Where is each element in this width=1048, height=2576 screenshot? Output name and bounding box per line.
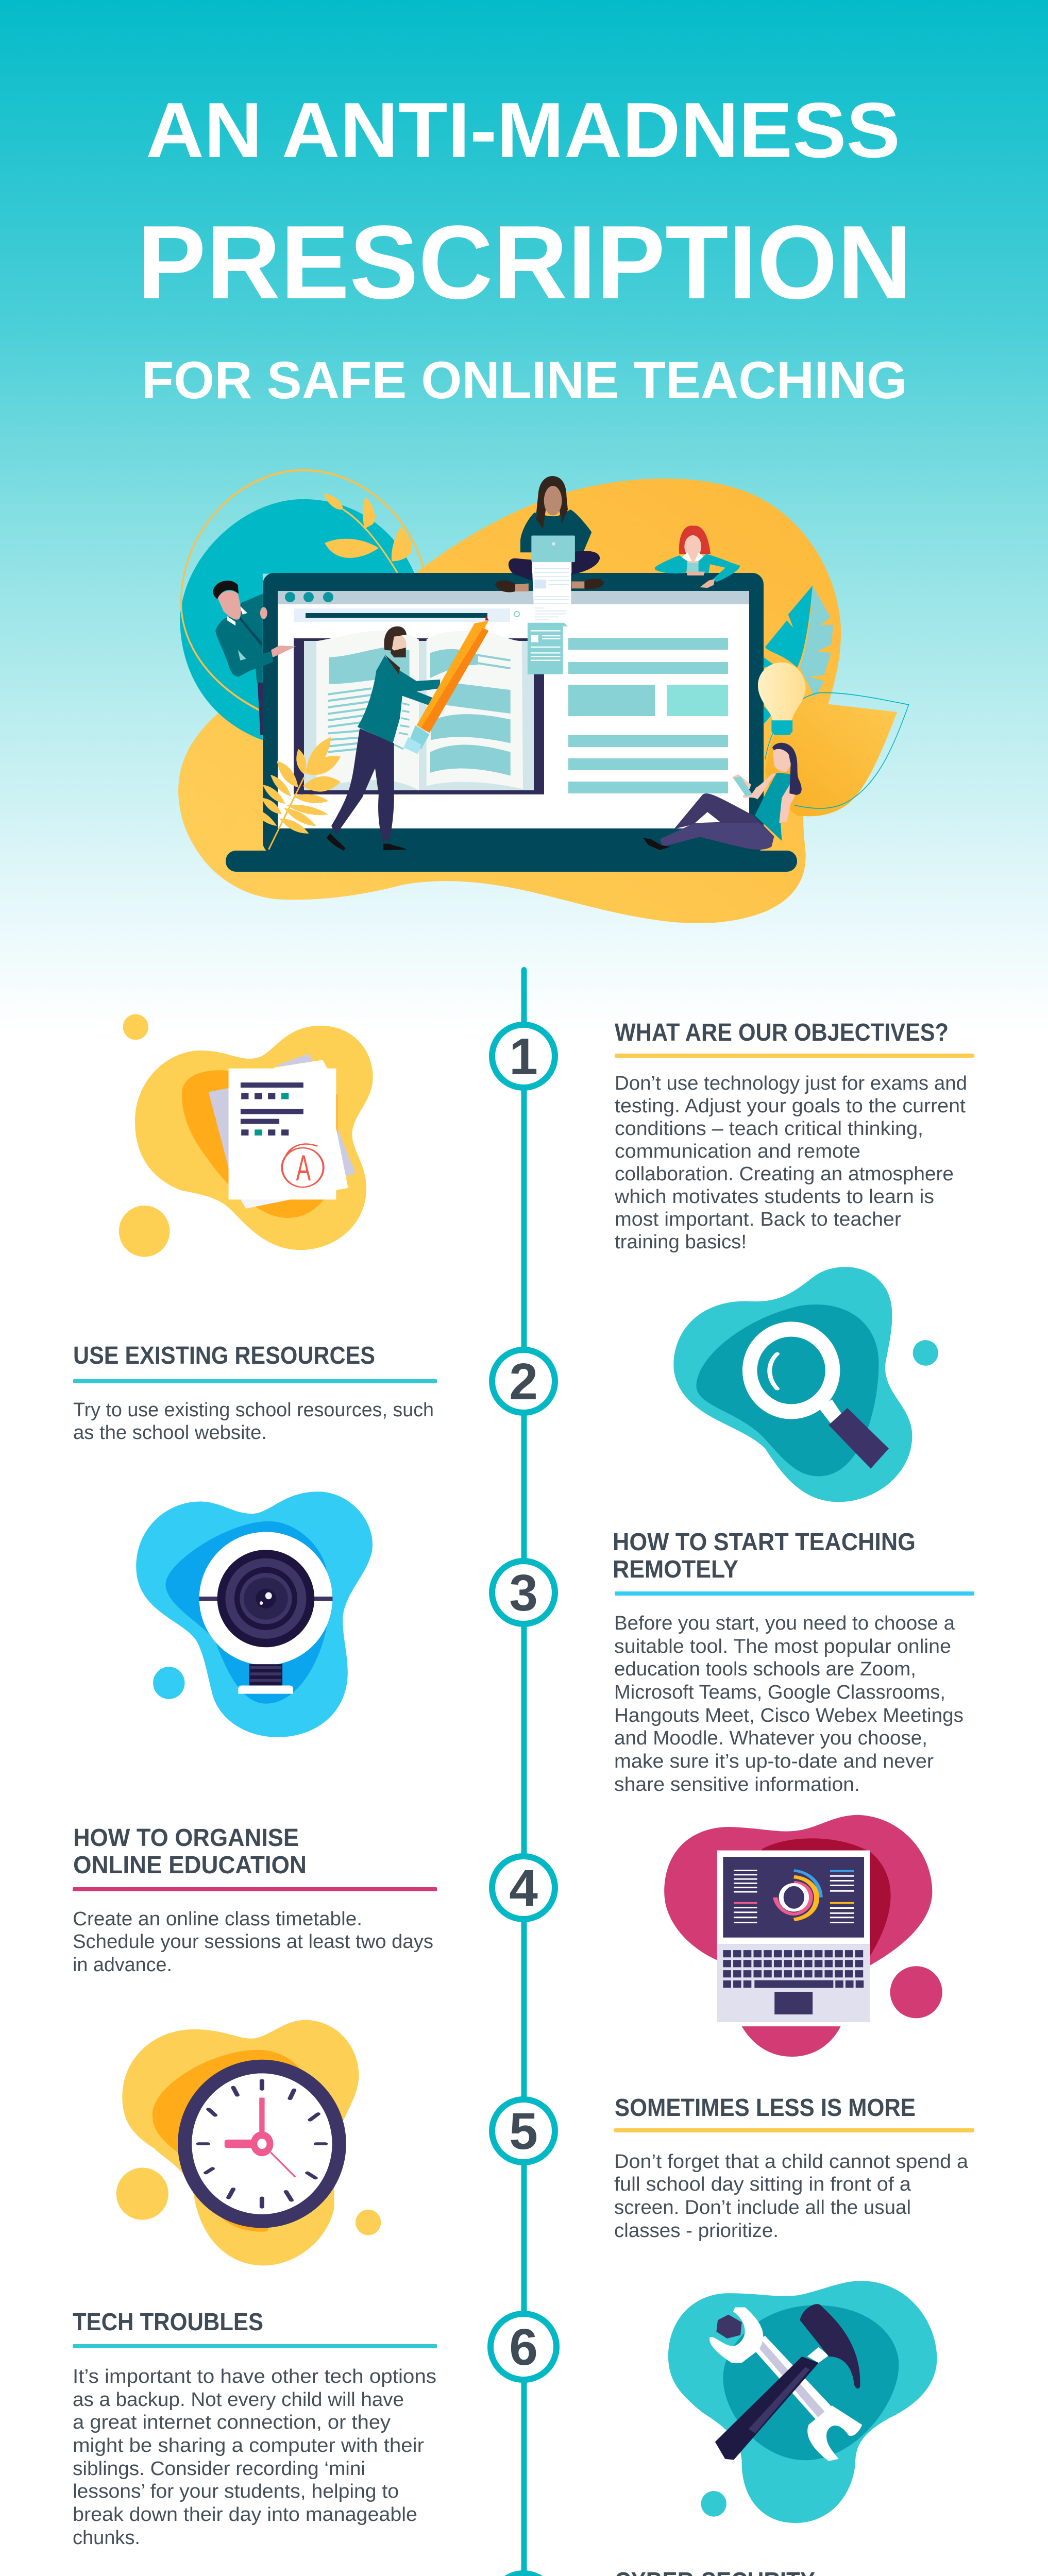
heading: SOMETIMES LESS IS MORE xyxy=(615,2094,916,2122)
icon: webcam xyxy=(136,1492,373,1737)
body text: in advance. xyxy=(73,1954,172,1976)
body text: Before you start, you need to choose a xyxy=(614,1613,955,1634)
body text xyxy=(73,2366,436,2549)
woman on top with laptop, red-haired woman, lightbulb, reading woman xyxy=(495,476,806,850)
section 1: what are our objectives xyxy=(614,1019,974,1253)
body text xyxy=(73,1399,434,1444)
open book and man with pencil xyxy=(316,616,523,851)
step 3 number: 3 xyxy=(509,1564,538,1622)
body text: break down their day into manageable xyxy=(73,2504,417,2526)
body text: collaboration. Creating an atmosphere xyxy=(615,1163,954,1185)
body text: education tools schools are Zoom, xyxy=(614,1658,916,1680)
section 2: use existing resources xyxy=(73,1342,437,1444)
teal background blob with ring and sprig xyxy=(180,470,425,740)
body text: siblings. Consider recording ‘mini xyxy=(73,2458,365,2480)
step 2 number xyxy=(492,1350,555,1413)
step 5 number: 5 xyxy=(509,2103,538,2160)
heading: WHAT ARE OUR OBJECTIVES? xyxy=(615,1019,949,1046)
body text: Don’t use technology just for exams and xyxy=(615,1073,967,1094)
underline xyxy=(73,1379,437,1383)
heading xyxy=(613,1529,916,1583)
body text: chunks. xyxy=(73,2527,140,2549)
step 5 number xyxy=(492,2099,555,2162)
heading xyxy=(73,1824,307,1879)
step 7 number xyxy=(492,2573,555,2576)
heading: USE EXISTING RESOURCES xyxy=(73,1342,375,1369)
body text: full school day sitting in front of a xyxy=(614,2174,911,2195)
body text: testing. Adjust your goals to the current xyxy=(615,1095,966,1117)
hero illustration: laptop with people xyxy=(178,470,909,923)
step 4 number: 4 xyxy=(509,1859,538,1917)
icon: laptop xyxy=(664,1815,942,2057)
title line 3: FOR SAFE ONLINE TEACHING xyxy=(142,351,907,410)
underline xyxy=(615,1054,974,1058)
body text xyxy=(614,1073,967,1253)
body text: and Moodle. Whatever you choose, xyxy=(614,1727,927,1749)
body text: screen. Don’t include all the usual xyxy=(614,2197,911,2218)
step 1 number xyxy=(492,1025,555,1088)
icon: magnifying glass xyxy=(673,1267,938,1502)
body text: training basics! xyxy=(615,1231,747,1253)
title xyxy=(137,87,912,410)
body text: most important. Back to teacher xyxy=(615,1209,901,1230)
body text: Hangouts Meet, Cisco Webex Meetings xyxy=(614,1705,964,1726)
step 3 number xyxy=(492,1561,555,1624)
section 4: how to organise online education xyxy=(73,1824,437,1976)
body text: make sure it’s up-to-date and never xyxy=(614,1751,934,1772)
body text: conditions – teach critical thinking, xyxy=(615,1118,923,1140)
body text: a great internet connection, or they xyxy=(73,2412,391,2433)
underline xyxy=(615,1591,974,1596)
step 2 number: 2 xyxy=(509,1353,538,1411)
plant in the foreground xyxy=(249,732,343,850)
body text xyxy=(614,2151,969,2242)
underline xyxy=(73,2344,437,2348)
heading: HOW TO START TEACHING xyxy=(613,1529,916,1556)
timeline line xyxy=(521,967,527,2576)
section 6: tech troubles xyxy=(73,2309,437,2549)
body text: Try to use existing school resources, such xyxy=(73,1399,434,1421)
body text: share sensitive information. xyxy=(614,1774,860,1795)
section 3: how to start teaching remotely xyxy=(613,1529,974,1795)
body text: Create an online class timetable. xyxy=(73,1908,362,1930)
title line 2: PRESCRIPTION xyxy=(137,204,912,321)
body text: Microsoft Teams, Google Classrooms, xyxy=(614,1682,945,1703)
icon: clock xyxy=(116,2020,381,2265)
body text: It’s important to have other tech options xyxy=(73,2366,436,2387)
man peeking from behind laptop xyxy=(213,581,296,735)
body text: suitable tool. The most popular online xyxy=(614,1636,951,1657)
underline xyxy=(73,1887,437,1891)
header background gradient xyxy=(0,0,1048,1030)
right side teal and yellow leaves xyxy=(764,585,909,816)
body text: lessons’ for your students, helping to xyxy=(73,2481,399,2502)
step 1 number: 1 xyxy=(509,1028,538,1086)
body text: might be sharing a computer with their xyxy=(73,2435,424,2456)
body text xyxy=(73,1908,433,1976)
underline xyxy=(614,2128,974,2132)
body text: communication and remote xyxy=(615,1141,860,1162)
step 6 number xyxy=(491,2314,556,2380)
body text: as the school website. xyxy=(73,1422,267,1444)
heading: HOW TO ORGANISE xyxy=(73,1824,299,1852)
heading: ONLINE EDUCATION xyxy=(73,1852,307,1879)
laptop body and screen xyxy=(226,573,797,872)
body text: classes - prioritize. xyxy=(614,2220,779,2242)
section 5: sometimes less is more xyxy=(614,2094,974,2242)
body text xyxy=(614,1613,964,1795)
yellow background blob xyxy=(178,479,841,923)
body text: as a backup. Not every child will have xyxy=(73,2389,404,2411)
body text: Schedule your sessions at least two days xyxy=(73,1931,433,1953)
heading: REMOTELY xyxy=(613,1556,738,1583)
icon: graded paper xyxy=(119,1014,373,1257)
icon: wrench and hammer xyxy=(668,2281,937,2523)
body text: Don’t forget that a child cannot spend a xyxy=(614,2151,969,2173)
body text: which motivates students to learn is xyxy=(614,1186,934,1208)
step 6 number: 6 xyxy=(509,2318,538,2376)
heading: TECH TROUBLES xyxy=(73,2309,263,2336)
icon: graded paper: A xyxy=(296,1147,311,1188)
step 4 number xyxy=(492,1856,555,1919)
title line 1: AN ANTI-MADNESS xyxy=(146,87,900,174)
